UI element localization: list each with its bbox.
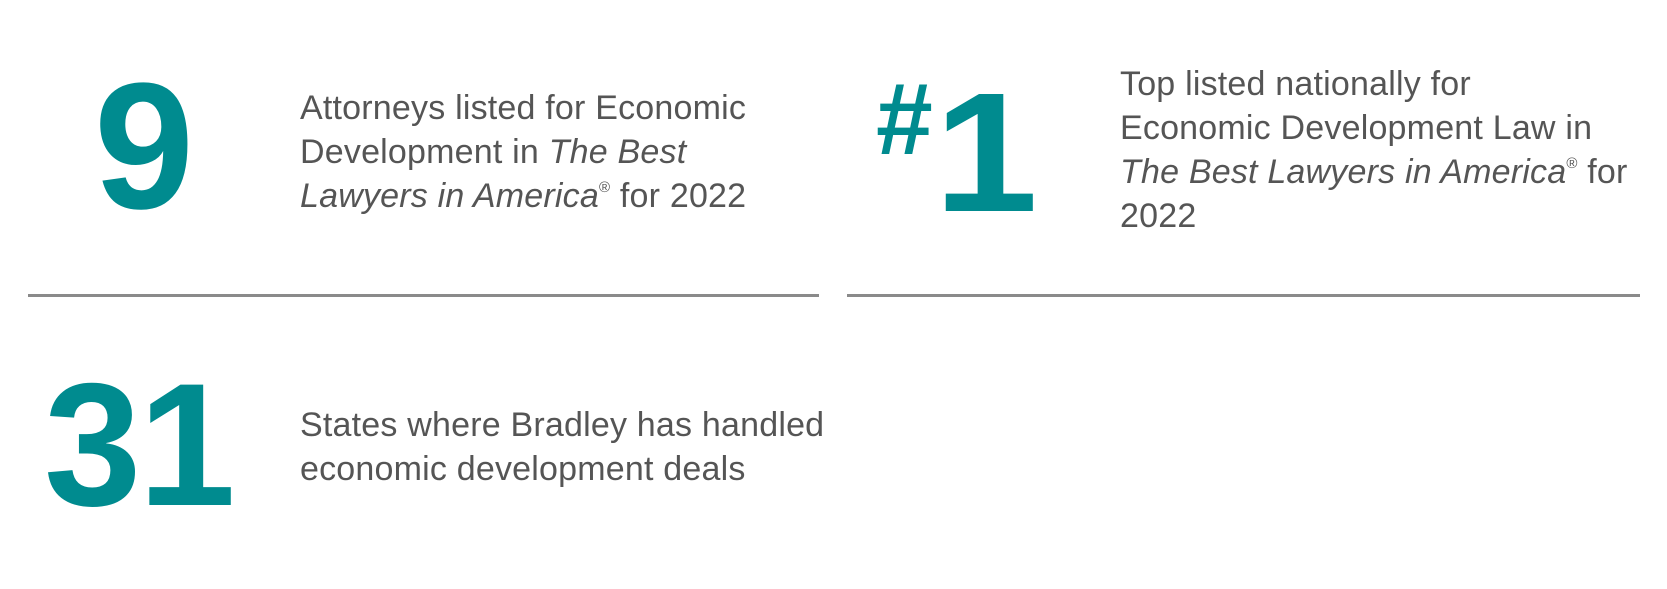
stat number: 9: 9: [94, 46, 194, 247]
text: attorneys listed: Development in The Best: [300, 133, 686, 171]
text: top listed nationally: The Best Lawyers in America® for: [1120, 153, 1628, 191]
digit one: 1: [934, 58, 1038, 248]
text: states: [300, 406, 824, 488]
text: states: economic development deals: [300, 450, 746, 488]
text: attorneys listed: Attorneys listed for Economic: [300, 89, 746, 127]
text: top listed nationally: Top listed nationally for: [1120, 65, 1471, 103]
hash sign: #: [876, 62, 933, 176]
stat number: #1: [876, 58, 1038, 248]
stat number: 31: 31: [44, 348, 233, 543]
text: top listed nationally: Economic Development Law in: [1120, 109, 1592, 147]
text: top listed nationally: 2022: [1120, 197, 1196, 235]
text: top listed nationally: [1120, 65, 1628, 235]
text: states: States where Bradley has handled: [300, 406, 824, 444]
text: attorneys listed: [300, 89, 746, 215]
text: attorneys listed: Lawyers in America® for 2022: [300, 177, 746, 215]
